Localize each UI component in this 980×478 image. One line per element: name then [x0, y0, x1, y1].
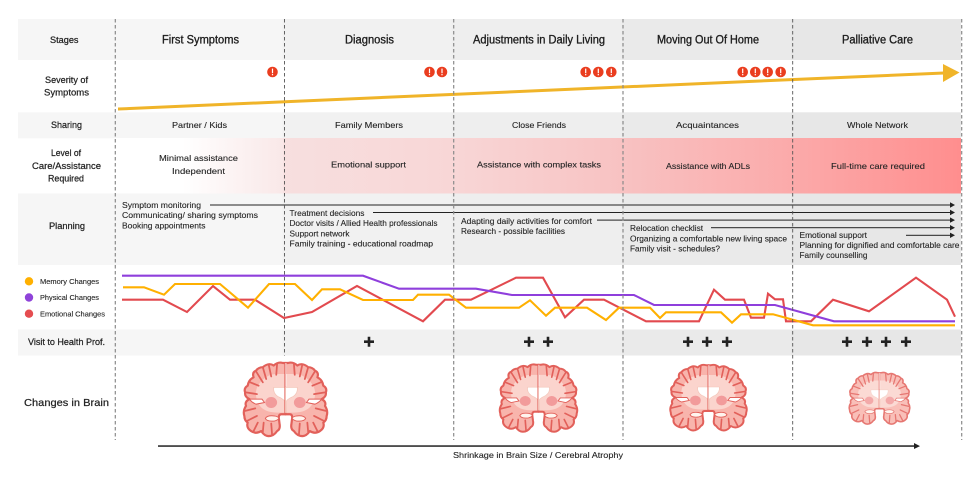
brain: moving out [670, 365, 747, 430]
planning text: Organizing a comfortable new living space [630, 233, 787, 243]
legend: symptom changes: Physical Changes [40, 293, 99, 302]
legend: symptom changes: Emotional Changes [40, 309, 105, 318]
planning text: Relocation checklist [630, 223, 704, 233]
planning text: Adapting daily activities for comfort [461, 216, 593, 226]
care level text [159, 153, 925, 176]
stage headings: Adjustments in Daily Living [473, 34, 605, 46]
planning text: Doctor visits / Allied Health professionals [290, 218, 438, 228]
label: stages: Stages [50, 35, 79, 45]
severity icons [267, 67, 786, 77]
label: visit to health professional: Visit to Health Prof. [28, 337, 105, 347]
label: level of care: Required [48, 174, 84, 184]
planning text: Treatment decisions [290, 208, 364, 218]
label: changes in brain: Changes in Brain [24, 397, 109, 409]
severity arrow [118, 64, 960, 110]
label: level of care: Level of [51, 148, 81, 158]
label: level of care [32, 148, 101, 184]
sharing row text: Close Friends [512, 120, 566, 130]
care level text: Assistance with ADLs [666, 161, 750, 171]
sharing row text: Family Members [335, 120, 403, 130]
planning text: Communicating/ sharing symptoms [122, 210, 258, 220]
stage headings: Palliative Care [842, 34, 913, 46]
brain: adjustments [500, 364, 577, 432]
brain shrinkage arrow [158, 443, 920, 460]
planning text [122, 200, 960, 260]
care level text: Assistance with complex tasks [477, 160, 601, 170]
planning arrows [210, 202, 955, 238]
legend: symptom changes: Memory Changes [40, 277, 99, 286]
planning text: Booking appointments [122, 220, 206, 230]
label: severity of symptoms: Symptoms [44, 88, 90, 98]
planning text: Family training - educational roadmap [290, 238, 433, 248]
planning text: Family counselling [800, 250, 868, 260]
label: level of care: Care/Assistance [32, 161, 101, 171]
label: severity of symptoms: Severity of [45, 75, 88, 85]
stage headings: Diagnosis [345, 34, 394, 46]
sharing row text: Whole Network [847, 120, 909, 130]
memory changes line [123, 284, 955, 325]
care level text: Emotional support [331, 160, 407, 170]
planning text: Emotional support [800, 230, 868, 240]
sharing row text [172, 120, 909, 130]
stage headings [162, 34, 913, 46]
planning text: Research - possible facilities [461, 226, 565, 236]
legend: symptom changes [25, 277, 105, 318]
care level text: Full-time care required [831, 161, 925, 171]
care level text: Minimal assistance [159, 153, 238, 163]
brain: diagnosis [244, 363, 327, 436]
plus marks: visits [364, 337, 911, 347]
sharing row text: Acquaintances [676, 120, 739, 130]
planning text: Planning for dignified and comfortable care [800, 240, 960, 250]
brain: palliative [849, 372, 910, 424]
row backgrounds [18, 19, 961, 356]
label: planning: Planning [49, 221, 85, 231]
stage headings: Moving Out Of Home [657, 34, 759, 46]
label: severity of symptoms [44, 75, 90, 98]
planning text: Symptom monitoring [122, 200, 201, 210]
brain shrinkage arrow: Shrinkage in Brain Size / Cerebral Atrophy [453, 450, 624, 460]
physical changes line [122, 276, 955, 321]
line chart: symptom changes [122, 276, 955, 325]
care level text: Independent [172, 166, 226, 176]
dashed stage dividers [115, 19, 962, 440]
sharing row text: Partner / Kids [172, 120, 227, 130]
row labels [24, 35, 109, 409]
planning text: Family visit - schedules? [630, 243, 720, 253]
brain illustrations [238, 356, 910, 442]
label: sharing: Sharing [51, 120, 82, 130]
planning text: Support network [290, 228, 350, 238]
emotional changes line [122, 278, 955, 321]
stage headings: First Symptoms [162, 34, 239, 46]
